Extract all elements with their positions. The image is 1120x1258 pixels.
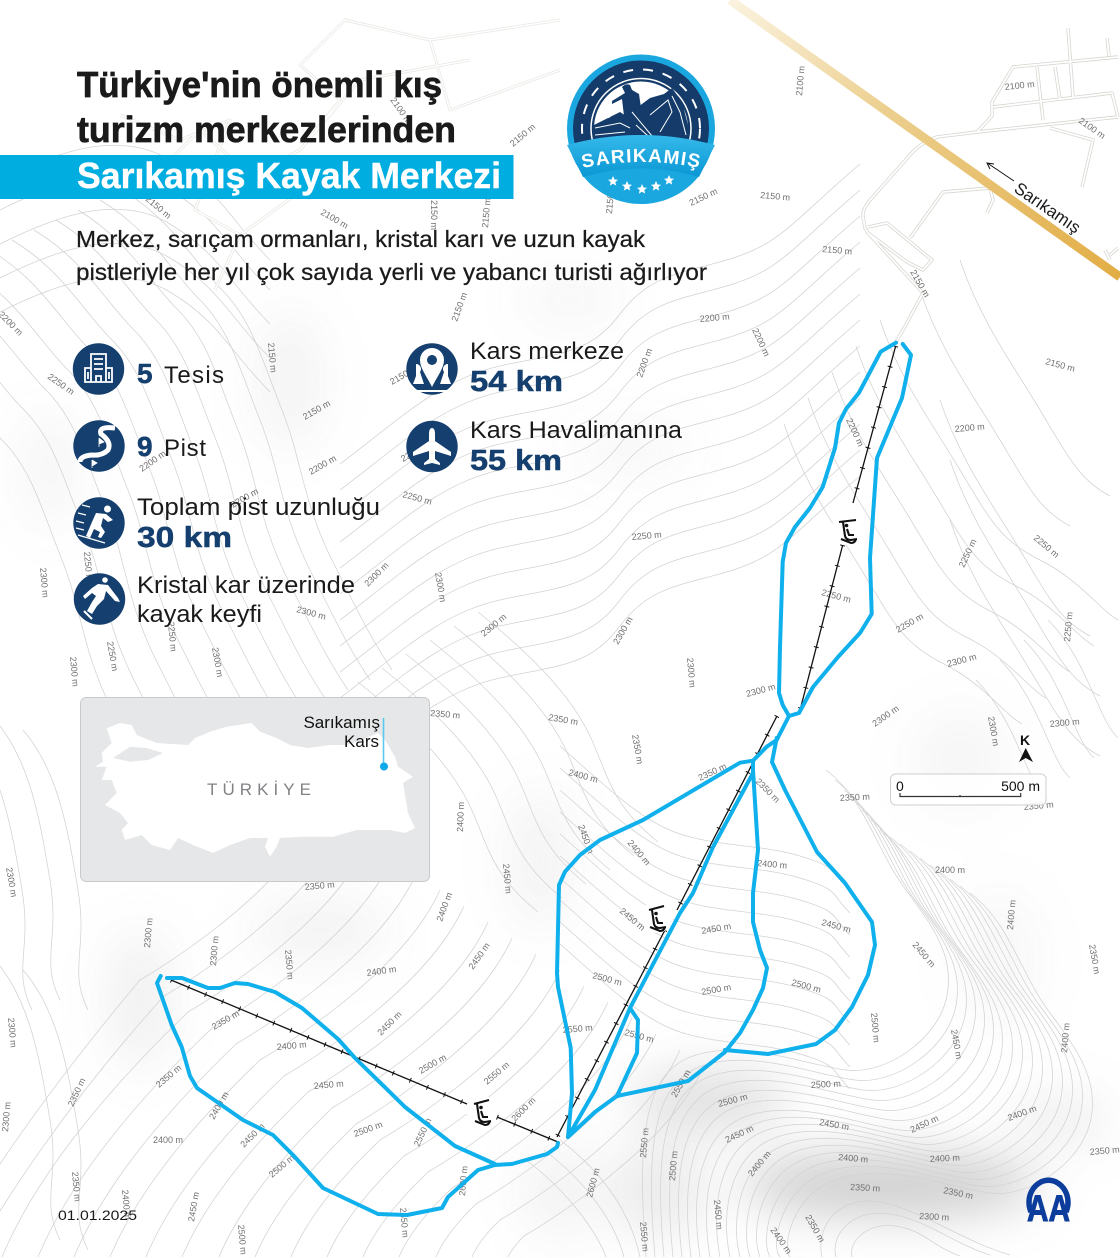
contour elevation labels: 2150 m (822, 244, 853, 257)
contour elevation labels: 2350 m (210, 1008, 241, 1032)
stat: total piste length: 30 km (137, 522, 232, 554)
contour elevation labels: 2450 m (910, 940, 937, 969)
contour elevation labels: 2350 m (66, 1076, 88, 1108)
location marker (380, 718, 388, 770)
contour elevation labels: 2150 m (388, 363, 419, 387)
contour elevation labels: 2500 m (267, 1153, 296, 1180)
contour elevation labels: 2250 m (820, 587, 852, 605)
contour elevation labels: 2450 m (466, 941, 492, 971)
contour elevation labels: 2200 m (699, 311, 730, 324)
contour elevation labels: 2600 m (509, 1095, 538, 1123)
contour elevation labels: 2350 m (154, 1063, 183, 1090)
description: Merkez, sarıçam ormanları, kristal karı ve uzun kayak (76, 226, 646, 252)
contour elevation labels: 2150 m (1044, 356, 1076, 374)
contour elevation labels: 2400 m (434, 891, 454, 923)
contour elevation labels: 2550 m (669, 1068, 693, 1099)
contour elevation labels: 2500 m (417, 1052, 448, 1076)
contour elevation labels: 2300 m (433, 572, 448, 603)
contour elevation labels: 2350 m (430, 708, 461, 721)
contour elevation labels: 2300 m (295, 604, 327, 622)
contour elevation labels: 2400 m (153, 1135, 183, 1145)
contour elevation labels: 2200 m (399, 440, 430, 464)
contour elevation labels: 2400 m (930, 1152, 960, 1164)
stat: 5 Tesis: Tesis (164, 362, 224, 389)
contour elevation labels: 2200 m (229, 486, 260, 510)
contour elevation labels: 2450 m (819, 1117, 850, 1132)
contour elevation labels: 2150 m (266, 342, 279, 373)
contour elevation labels: 2250 m (957, 537, 979, 569)
contour elevation labels: 2150 m (144, 194, 173, 221)
contour elevation labels: 2550 m (638, 1127, 651, 1158)
stat: distance to Kars airport (406, 417, 683, 477)
contour elevation labels: 2350 m (283, 949, 296, 980)
contour elevation labels: 2150 m (449, 291, 469, 323)
north arrow: K (1020, 732, 1030, 748)
contour elevation labels: 2400 m (276, 1039, 307, 1052)
contour elevation labels: 2550 m (562, 1022, 593, 1035)
contour elevation labels: 2250 m (105, 641, 120, 672)
contour elevation labels: 2500 m (352, 1119, 384, 1139)
stat: 5 Tesis (73, 343, 224, 395)
stat: 9 Pist: Pist (164, 435, 206, 462)
contour elevation labels: 2300 m (6, 1017, 19, 1048)
ski lifts (171, 346, 896, 1142)
contour elevation labels: 2600 m (457, 1165, 470, 1196)
contour elevation labels: 2150 m (604, 183, 617, 214)
stat: total piste length: Toplam pist uzunluğu (137, 494, 380, 521)
faint road network (120, 20, 1118, 342)
contour elevation labels: 2200 m (307, 453, 338, 477)
contour elevation labels: 2200 m (137, 448, 168, 474)
contour elevation labels: 2350 m (840, 791, 870, 803)
stat: distance to Kars centre (406, 338, 624, 398)
contour elevation labels: 2400 m (768, 1225, 794, 1256)
contour elevation labels: 2300 m (38, 567, 51, 598)
contour elevation labels: 2250 m (1062, 611, 1075, 642)
scale bar (890, 774, 1046, 805)
contour elevation labels: 2350 m (1023, 799, 1054, 812)
contour elevation labels: 2400 m (935, 865, 965, 875)
contour elevation labels: 2200 m (634, 347, 654, 379)
contour elevation labels: 2450 m (949, 1029, 964, 1060)
contour elevation labels: 2450 m (909, 1113, 940, 1135)
contour elevation labels: 2250 m (894, 611, 925, 635)
road to Sarıkamış (730, 0, 1120, 277)
contour elevation labels: 2100 m (319, 207, 350, 231)
contour elevation labels: 2300 m (479, 612, 508, 639)
contour elevation labels: 2450 m (313, 1078, 344, 1091)
lift line: southwest (171, 980, 558, 1142)
icon: skier on snow (74, 573, 125, 625)
contour elevation labels: 2450 m (712, 1199, 725, 1230)
logo: Sarıkamış badge: SARIKAMIŞ (582, 148, 700, 170)
contour elevation labels: 2100 m (1077, 115, 1107, 141)
contour elevation labels: 2300 m (362, 560, 391, 588)
road label: Sarıkamış with arrow (987, 163, 1084, 237)
contour elevation labels: 2400 m (567, 767, 599, 785)
location label: Sarıkamış, Kars (303, 713, 380, 751)
contour elevation labels: 2400 m (838, 1152, 869, 1165)
panel: Türkiye locator map (80, 698, 430, 882)
contour elevation labels: 2450 m (618, 906, 647, 933)
icon: winding piste (73, 420, 125, 472)
contour elevation labels: 2500 m (717, 1091, 749, 1109)
title: Türkiye'nin önemli kış (77, 64, 442, 105)
stat: crystal snow skiing (74, 572, 355, 628)
contour elevation labels: 2450 m (186, 1191, 201, 1222)
contour elevation labels: 2250 m (46, 371, 76, 397)
contour elevation labels: 2300 m (1049, 716, 1080, 729)
contour elevation labels: 2150 m (908, 268, 932, 299)
contour elevation labels: 2400 m (625, 838, 652, 867)
contour elevation labels: 2350 m (630, 734, 645, 765)
contour elevation labels: 2400 m (746, 1149, 773, 1178)
contour elevation labels: 2250 m (631, 529, 662, 542)
piste: central straight (568, 761, 753, 1137)
stat: 9 Pist (73, 420, 206, 472)
stat: crystal snow skiing: kayak keyfi (137, 601, 262, 628)
icon: airplane (406, 421, 458, 472)
contour elevation labels: 2100 m (794, 65, 807, 96)
stat: distance to Kars airport: 55 km (470, 445, 562, 477)
icon: chairlift east (832, 514, 862, 544)
contour elevation labels: 2400 m (757, 858, 788, 871)
lift line: east (799, 346, 896, 713)
Marmara sea (113, 747, 163, 762)
contour elevation labels: 2300 m (685, 657, 698, 688)
date: 01.01.2025 (58, 1207, 137, 1223)
contour elevation labels: 2300 m (208, 935, 221, 966)
description: pistleriyle her yıl çok sayıda yerli ve yabancı turisti ağırlıyor (76, 259, 707, 285)
map label: TÜRKİYE: TÜRKİYE (207, 780, 311, 799)
piste: connector and west branch (557, 716, 789, 1137)
contour elevation labels: 2350 m (943, 1185, 974, 1201)
contour elevation labels: 2400 m (207, 1090, 231, 1121)
icon: chairlift southwest (466, 1096, 498, 1126)
contour elevation labels: 2400 m (1006, 1103, 1038, 1123)
stat: crystal snow skiing: Kristal kar üzerinde (137, 572, 355, 599)
contour elevation labels: 2150 m (480, 197, 493, 228)
contour elevation labels: 2300 m (946, 651, 978, 669)
highlighted subtitle banner: Sarıkamış Kayak Merkezi (77, 155, 501, 196)
contour elevation labels: 2150 m (760, 190, 791, 203)
contour elevation labels: 2300 m (210, 647, 225, 678)
scale bar: 500 m (1001, 778, 1040, 794)
contour elevation labels: 2350 m (803, 1213, 827, 1244)
piste: southwest inner (167, 978, 495, 1164)
contour elevation labels: 2550 m (623, 1027, 655, 1045)
contour elevation labels: 2550 m (398, 1207, 411, 1238)
contour elevation labels: 2450 m (724, 1123, 755, 1145)
stat: distance to Kars centre: 54 km (470, 366, 563, 398)
contour elevation labels: 2300 m (870, 703, 901, 729)
contour elevation labels: 2500 m (667, 1150, 680, 1181)
contour elevation labels: 2300 m (68, 656, 81, 687)
contour elevation labels: 2400 m (1005, 899, 1018, 930)
title: turizm merkezlerinden (77, 109, 456, 150)
piste: southwest outer (157, 976, 558, 1215)
contour elevation labels: 2150 m (688, 186, 719, 208)
description (76, 226, 707, 285)
contour elevation labels: 2300 m (611, 615, 635, 646)
contour elevation labels: 2400 m (366, 964, 397, 978)
road label: Sarıkamış with arrow: Sarıkamış (1011, 179, 1084, 237)
scale bar: 0 (896, 778, 904, 794)
piste: far east loop (725, 738, 875, 1054)
contour elevation labels: 2350 m (304, 879, 335, 892)
contour elevation labels: 2500 m (701, 982, 732, 997)
contour elevation labels: 2400 m (120, 1189, 133, 1220)
contour elevation labels: 2250 m (401, 489, 433, 507)
contour elevation labels: 2450 m (576, 823, 596, 855)
contour elevation labels: 2400 m (455, 802, 466, 832)
contour elevation labels: 2550 m (412, 1116, 434, 1148)
contour elevation labels: 2300 m (986, 716, 1001, 747)
icon: location pin (406, 343, 458, 395)
contour elevation labels: 2450 m (820, 917, 852, 935)
contour elevation labels: 2150 m (429, 200, 439, 230)
ski pistes (157, 343, 911, 1215)
stat: total piste length (73, 494, 380, 554)
contour elevation labels: 2150 m (301, 398, 332, 422)
contour elevation labels: 2250 m (1032, 533, 1061, 560)
stat: distance to Kars centre: Kars merkeze (470, 338, 624, 365)
icon: chairlift central (641, 901, 673, 933)
contour elevation labels: 2350 m (697, 761, 728, 783)
contour elevation labels: 2350 m (850, 1182, 880, 1194)
icon: skier (73, 497, 125, 549)
contour elevation labels: 2200 m (750, 327, 772, 358)
piste: small link (617, 1008, 638, 1096)
contour elevation labels: 2100 m (1004, 79, 1035, 92)
contour elevation labels: 2500 m (811, 1078, 841, 1090)
contour elevation labels: 2200 m (954, 421, 985, 434)
contour elevation labels: 2350 m (70, 1171, 83, 1202)
contour elevation labels: 2150 m (508, 122, 537, 149)
contour elevation labels: 2500 m (236, 1224, 249, 1255)
contour elevation labels: 2450 m (238, 1121, 267, 1149)
map of Türkiye (95, 723, 415, 857)
stat: distance to Kars airport: Kars Havalimanına (470, 417, 683, 444)
contour elevation labels: 2550 m (482, 1060, 511, 1087)
contour elevation labels: 2450 m (375, 1009, 404, 1037)
contour elevation labels: 2350 m (1089, 1144, 1120, 1157)
contour elevation labels: 2300 m (142, 917, 155, 948)
contour elevation labels: 2400 m (1059, 1022, 1072, 1053)
stat: 5 Tesis: 5 (137, 358, 153, 389)
contour elevation labels: 2450 m (501, 863, 514, 894)
north arrow (1019, 732, 1033, 762)
contour elevation labels: 2300 m (745, 681, 777, 699)
contour elevation labels: 2300 m (919, 1211, 949, 1223)
logo: Sarıkamış badge (567, 54, 715, 204)
contour elevation labels: 2550 m (638, 1221, 651, 1252)
icon: building (73, 343, 124, 395)
lift line: central (557, 716, 777, 1137)
hillshade (20, 280, 1110, 1240)
contour elevation labels: 2500 m (869, 1012, 882, 1043)
contour elevation labels: 2450 m (701, 921, 732, 936)
contour elevation labels: 2100 m (388, 95, 414, 126)
contour elevation labels: 2300 m (4, 867, 19, 898)
stat: 9 Pist: 9 (137, 431, 153, 462)
contour elevation labels: 2250 m (166, 621, 179, 652)
contour elevation labels: 2350 m (1087, 944, 1102, 975)
logo: AA: AA (1027, 1188, 1070, 1229)
contour elevation labels: 2250 m (82, 551, 95, 582)
contour elevation labels: 2500 m (591, 970, 623, 988)
piste: east loop (779, 343, 911, 716)
contour elevation labels: 2200 m (844, 417, 866, 448)
contour elevation labels: 2350 m (754, 776, 782, 805)
contour elevation labels: 2300 m (0, 1101, 13, 1132)
location label: Sarıkamış, Kars: Sarıkamış (303, 713, 380, 732)
title (77, 64, 456, 150)
contour elevation labels: 2350 m (548, 712, 579, 727)
piste: central east curve (568, 770, 767, 1137)
logo: AA (1027, 1180, 1070, 1229)
contour elevation labels: 2500 m (790, 977, 822, 995)
contour elevation labels: 2600 m (584, 1167, 602, 1199)
location label: Sarıkamış, Kars: Kars (344, 732, 379, 751)
